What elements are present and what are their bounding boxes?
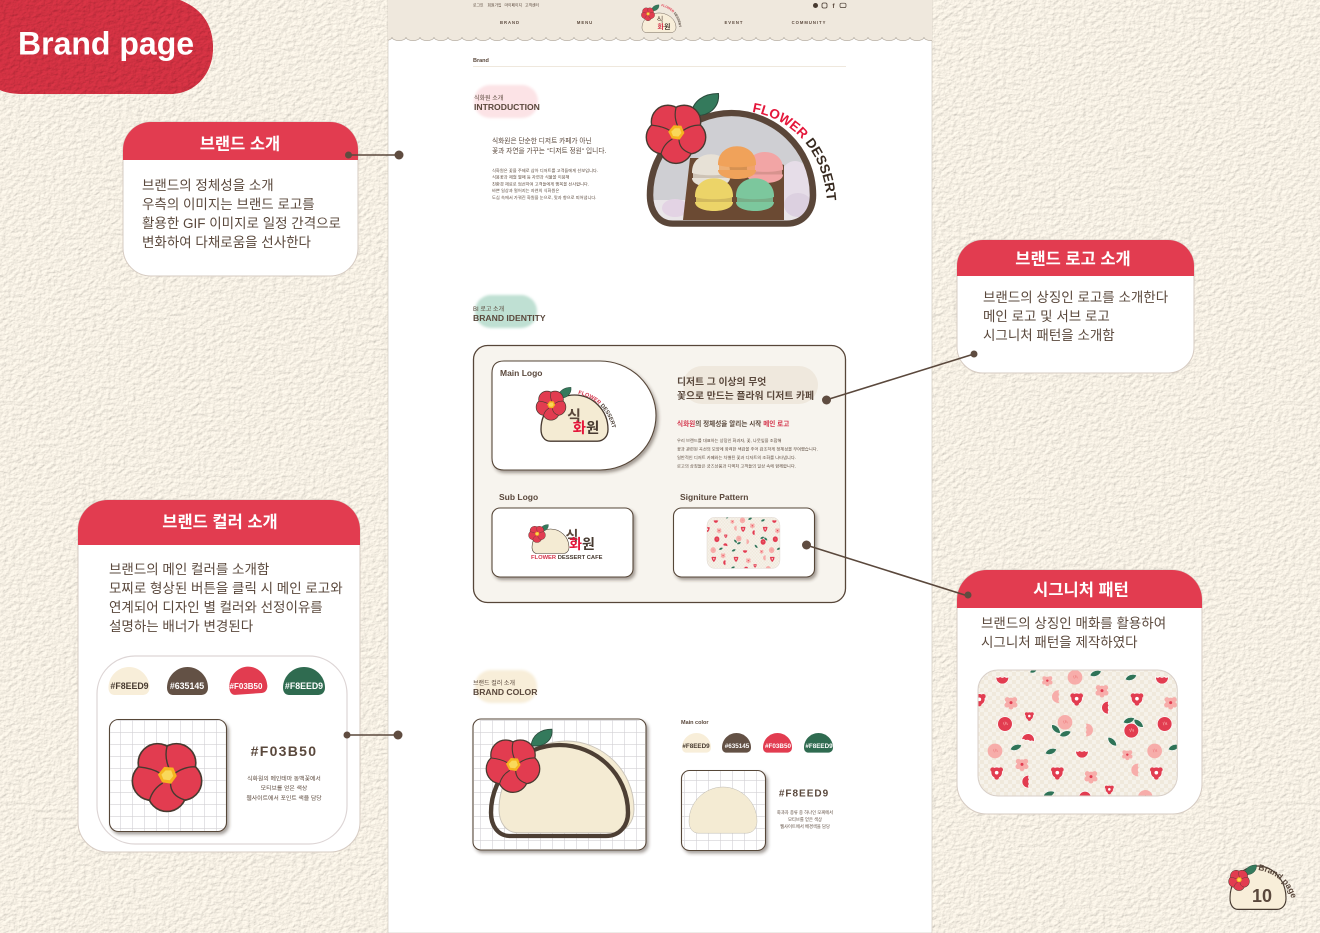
page number badge: 10 <box>1252 886 1272 906</box>
intro text: 꽃과 자연을 가꾸는 "디저트 정원" 입니다. <box>492 146 606 155</box>
main logo card: FLOWER DESSERT <box>578 390 616 428</box>
swatches: #F03B50 <box>230 682 263 691</box>
connector: logo intro <box>822 350 978 404</box>
main logo card <box>491 360 661 476</box>
section: introduction <box>474 84 836 227</box>
connector: brand intro <box>345 150 404 160</box>
top links <box>473 2 539 8</box>
main logo description: 꽃으로 만드는 플라워 디저트 카페 <box>677 389 814 402</box>
body text <box>981 616 1166 650</box>
card: brand intro: 브랜드 소개 <box>200 134 280 154</box>
navigation <box>500 20 826 25</box>
body text: 우측의 이미지는 브랜드 로고를 <box>142 197 315 212</box>
color description: #F8EED9 <box>779 788 829 800</box>
top links: 로그인 <box>473 2 484 8</box>
page number badge <box>1228 864 1296 910</box>
curved text: flower dessert <box>752 112 827 202</box>
site header <box>388 0 932 41</box>
main logo description: 로고의 상징들은 궁즈상품과 디렉처 고객들의 일상 속에 함께합니다. <box>677 462 796 470</box>
body text: 메인 로고 및 서브 로고 <box>983 309 1110 324</box>
section: brand identity <box>472 294 846 604</box>
signature pattern card <box>674 492 814 577</box>
color description: 화과자 종류 중 하나인 모찌에서 <box>777 809 833 816</box>
intro text: 식화원은 단순한 디저트 카페가 아닌 <box>492 136 592 145</box>
swatches: #635145 <box>170 681 204 691</box>
signature pattern card: Signiture Pattern <box>680 492 748 502</box>
heading <box>473 295 546 328</box>
color description <box>246 743 322 802</box>
social icons: f <box>832 3 835 10</box>
connector: pattern <box>802 540 972 598</box>
top links: 마이페이지 <box>504 2 522 8</box>
body text <box>983 290 1169 343</box>
heading: BI 로고 소개 <box>473 305 504 313</box>
section: brand color <box>473 670 833 850</box>
color description: 모티브를 얻은 색상 <box>788 816 822 823</box>
card: brand logo intro <box>957 240 1194 373</box>
intro text <box>492 136 606 201</box>
body text <box>142 178 341 250</box>
identity panel <box>472 344 846 604</box>
sub logo card: 식 <box>566 528 578 544</box>
top links: 고객센터 <box>525 2 539 8</box>
swatches <box>108 665 325 695</box>
top links: 회원가입 <box>488 2 501 8</box>
body text: 활용한 GIF 이미지로 일정 간격으로 <box>142 216 341 231</box>
card: brand logo intro: 브랜드 로고 소개 <box>1015 250 1131 268</box>
navigation: MENU <box>577 20 593 25</box>
color hero on grid <box>473 719 646 850</box>
header logo: 화원 <box>658 22 670 31</box>
swatches: #F8EED9 <box>682 743 710 750</box>
navigation: EVENT <box>725 20 743 25</box>
main logo description: 꽃과 관련된 곡선의 모양에 화려한 색감을 주어 감조하게 정체성을 부여했습니다. <box>677 446 818 452</box>
color sample box <box>682 770 766 850</box>
main logo description <box>677 366 818 470</box>
body text: 모찌로 형상된 버튼을 클릭 시 메인 로고와 <box>109 581 343 596</box>
color description: 식화원의 메인테마 동백꽃에서 <box>247 774 321 782</box>
breadcrumb: Brand <box>473 58 489 64</box>
main color label: Main color <box>681 720 709 726</box>
intro text: 식용꽃과 제철 열매 등 자연과 식물을 이용해 <box>492 174 570 180</box>
heading <box>473 670 538 703</box>
macaron logo image <box>646 93 836 227</box>
intro text: 도심 속에서 가꿔진 화원을 눈으로, 맛과 향으로 피어냅니다. <box>492 194 596 201</box>
sub logo card: Sub Logo <box>499 492 538 502</box>
heading: BRAND COLOR <box>473 687 538 697</box>
main logo card: 화원 <box>573 420 599 437</box>
color description: 모티브를 얻은 색상 <box>261 784 308 792</box>
sub logo card: FLOWER DESSERT CAFE <box>531 555 603 561</box>
swatches: #635145 <box>725 743 750 750</box>
heading: 식화원 소개 <box>474 94 503 102</box>
color description <box>777 788 833 830</box>
intro text: 친환경 재료로 엄선하여 고객들에게 행복을 선사합니다. <box>492 180 589 188</box>
body text: 설명하는 배너가 변경된다 <box>109 619 254 634</box>
swatches: #F8EED9 <box>110 681 149 691</box>
body text: 브랜드의 상징인 로고를 소개한다 <box>983 290 1169 305</box>
card: brand color intro: 브랜드 컬러 소개 <box>162 512 278 532</box>
flower on grid <box>110 720 226 832</box>
card: signature pattern: 시그니처 패턴 <box>1033 580 1129 600</box>
color description: 웹사이트에서 배경색을 담당 <box>780 823 830 830</box>
navigation: COMMUNITY <box>792 20 826 25</box>
main logo description: 식화원의 정체성을 알리는 시작 메인 로고 <box>677 419 789 428</box>
body text <box>109 562 343 634</box>
card: brand intro <box>123 122 358 276</box>
central web page mockup <box>388 0 932 933</box>
macaron logo image: FLOWER DESSERT <box>752 103 836 200</box>
body text: 시그니처 패턴을 소개함 <box>983 328 1115 343</box>
main logo description: 디저트 그 이상의 무엇 <box>677 375 766 388</box>
title text: Brand page <box>18 26 194 62</box>
body text: 시그니처 패턴을 제작하였다 <box>981 635 1138 650</box>
navigation: BRAND <box>500 20 520 25</box>
header logo: 식 <box>657 15 663 24</box>
swatches <box>682 733 833 753</box>
main logo description: 우리 브랜드를 대표하는 상징인 화과자, 꽃, 나뭇잎을 조합해 <box>677 437 782 444</box>
body text: 브랜드의 메인 컬러를 소개함 <box>109 562 269 577</box>
heading: 브랜드 컬러 소개 <box>473 679 515 687</box>
inner color panel <box>97 656 347 844</box>
card: brand color intro <box>78 500 360 852</box>
body text: 브랜드의 상징인 매화를 활용하여 <box>981 616 1166 631</box>
title tab: Brand page <box>0 0 213 94</box>
swatches: #F8EED9 <box>285 681 323 691</box>
intro text: 바쁜 일상과 멀어지는 자연의 식화원은 <box>492 187 559 194</box>
page number badge: Brand page <box>1258 864 1296 898</box>
body text: 브랜드의 정체성을 소개 <box>142 178 274 193</box>
swatches: #F8EED9 <box>805 743 833 750</box>
social icons <box>813 3 846 10</box>
main logo description: 일반적인 디저트 카페와는 차별된 꽃과 디저트의 조화를 나타냅니다. <box>677 454 796 461</box>
header logo <box>641 4 682 33</box>
swatches: #F03B50 <box>765 743 791 750</box>
intro text: 식화원은 꽃을 주제로 삼아 디저트를 고객들에게 선보입니다. <box>492 167 598 174</box>
heading: INTRODUCTION <box>474 102 540 112</box>
card: signature pattern <box>957 570 1202 814</box>
pattern image <box>973 669 1180 805</box>
color description: 웹사이트에서 포인트 색을 담당 <box>246 794 322 802</box>
main logo card: Main Logo <box>500 368 542 378</box>
color description: #F03B50 <box>251 743 317 759</box>
body text: 변화하여 다채로움을 선사한다 <box>142 235 312 250</box>
heading: BRAND IDENTITY <box>473 313 546 323</box>
body text: 연계되어 디자인 별 컬러와 선정이유를 <box>109 600 323 615</box>
sub logo card <box>492 492 633 577</box>
main logo card: 식 <box>567 408 581 425</box>
sub logo card: 화원 <box>569 536 595 552</box>
header logo: FLOWER DESSERT <box>661 4 682 27</box>
connector: color intro <box>344 730 402 740</box>
heading <box>474 85 540 118</box>
